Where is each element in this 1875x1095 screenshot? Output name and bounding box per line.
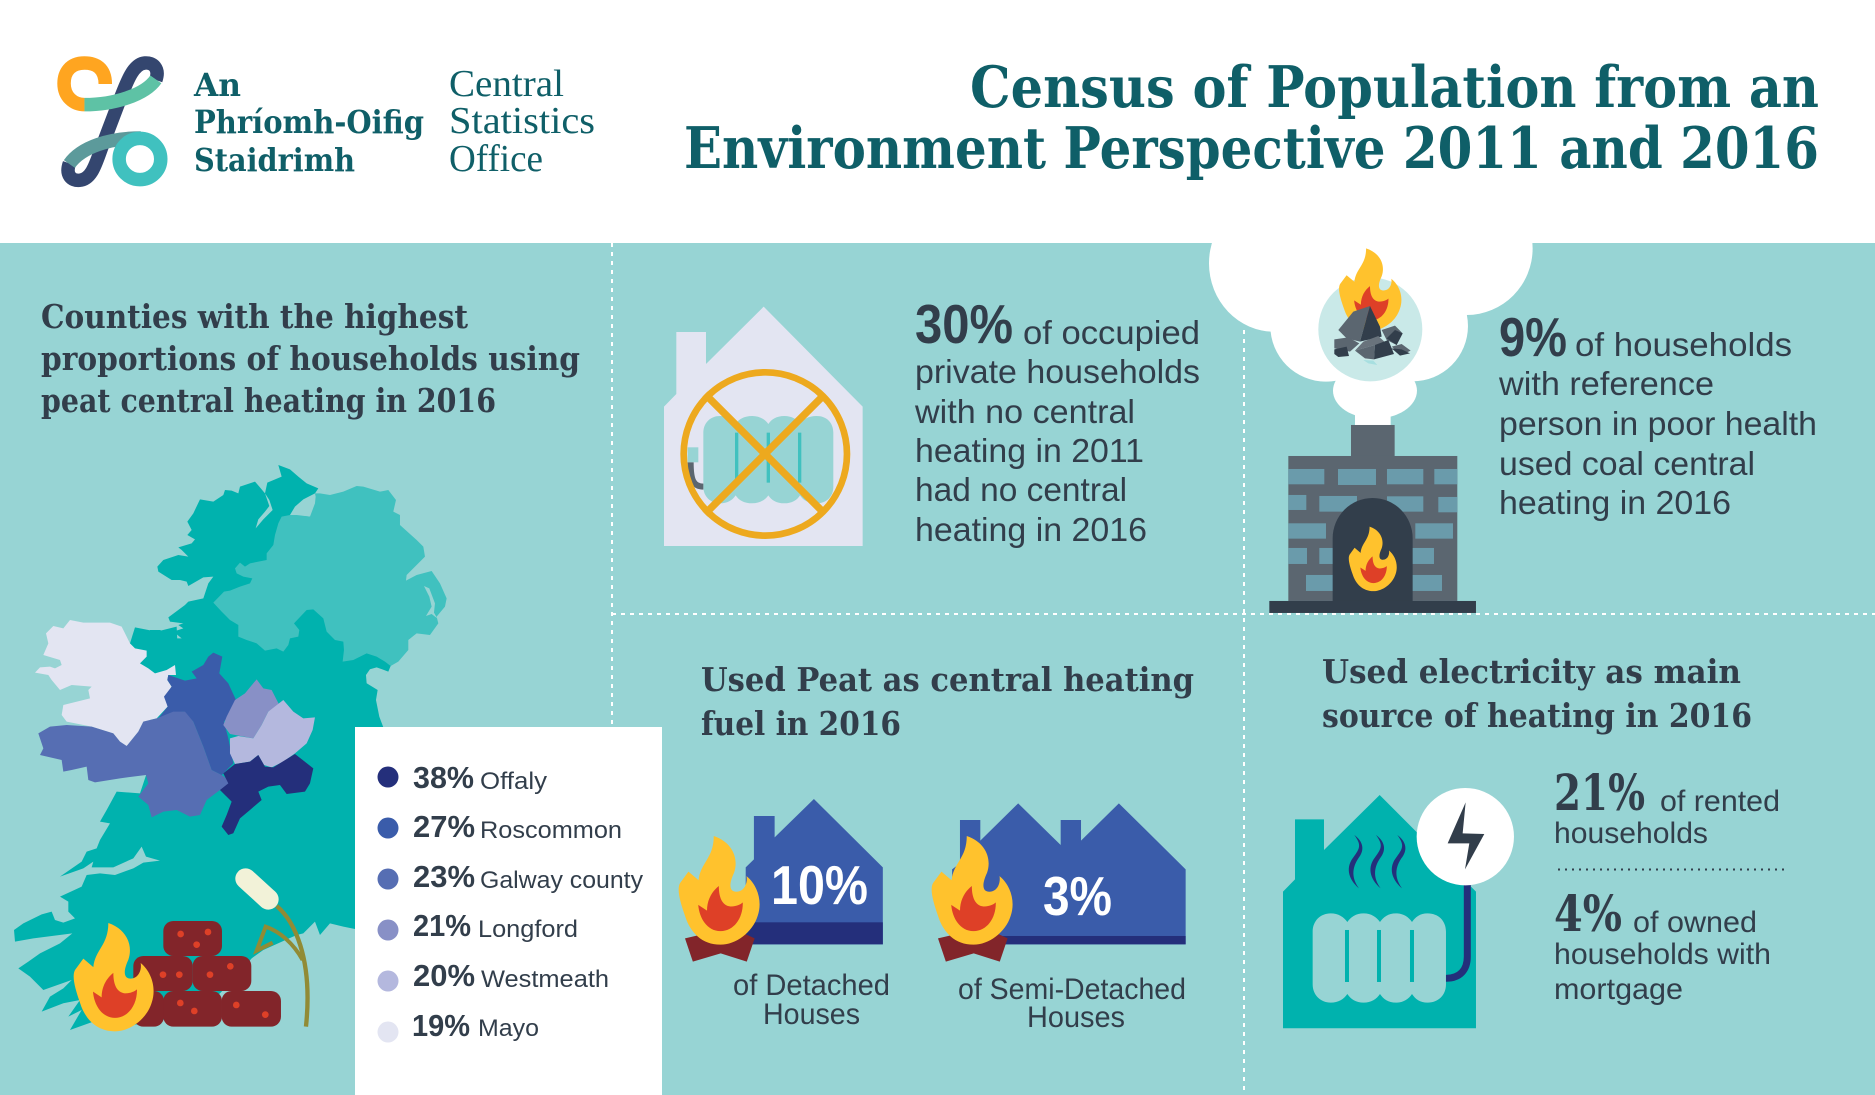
map heading	[41, 297, 580, 420]
map heading: peat central heating in 2016	[41, 381, 496, 420]
21% statistic: of rented	[1660, 785, 1780, 818]
semi-detached label: Houses	[1027, 1001, 1125, 1034]
icon: semi-detached houses	[952, 803, 1186, 944]
chimney stack	[1351, 425, 1395, 457]
legend dots	[378, 766, 398, 1042]
Northern Ireland	[213, 486, 447, 666]
legend counties: Westmeath	[481, 966, 609, 993]
radiator	[1313, 913, 1446, 1003]
fireplace arch	[1333, 498, 1413, 601]
4% statistic: mortgage	[1554, 973, 1683, 1006]
30% statistic: heating in 2011	[915, 432, 1144, 469]
21% statistic	[1554, 763, 1780, 850]
30% statistic	[914, 293, 1200, 548]
county: Roscommon	[158, 653, 236, 775]
legend values: 23%	[413, 859, 475, 894]
legend counties: Mayo	[478, 1015, 539, 1042]
chimney body	[1288, 456, 1457, 601]
logo English name: Statistics	[449, 100, 595, 142]
map of Ireland	[14, 465, 447, 1030]
logo Irish name	[193, 66, 424, 179]
4% statistic: 4%	[1554, 884, 1622, 943]
bricks	[1288, 469, 1457, 591]
legend values: 21%	[413, 908, 471, 943]
9% statistic: heating in 2016	[1499, 484, 1731, 521]
smoke cloud	[1209, 182, 1533, 427]
legend counties: Offaly	[480, 768, 547, 795]
map heading: proportions of households using	[41, 339, 580, 378]
legend counties: Longford	[478, 916, 578, 943]
electricity statistics	[1554, 763, 1786, 1006]
icon: flame on coal	[1339, 248, 1401, 330]
peat fuel heading: Used Peat as central heating	[701, 660, 1194, 699]
Strangford Lough	[424, 586, 437, 618]
3% value: 3%	[1043, 865, 1112, 927]
electricity heading	[1322, 652, 1752, 735]
icon: electric heated house	[1283, 788, 1514, 1028]
island: southern base	[14, 713, 373, 1030]
logo English name: Office	[449, 138, 543, 180]
radiator	[688, 416, 833, 503]
legend	[355, 727, 662, 1095]
detached label: Houses	[763, 998, 860, 1031]
30% statistic: with no central	[914, 393, 1135, 430]
legend values: 20%	[413, 958, 475, 993]
peat fuel heading: fuel in 2016	[701, 704, 901, 743]
title	[684, 54, 1819, 182]
detached label	[733, 969, 890, 1031]
10% value: 10%	[771, 854, 868, 916]
4% statistic	[1554, 884, 1771, 1006]
30% statistic: 30%	[915, 293, 1013, 355]
lightning bolt	[1448, 802, 1484, 869]
legend values: 38%	[413, 760, 474, 795]
30% statistic: private households	[915, 353, 1200, 390]
4% statistic: of owned	[1633, 906, 1757, 939]
icon: hearth flame	[1349, 527, 1397, 591]
county: Galway	[38, 712, 228, 817]
map heading: Counties with the highest	[41, 297, 469, 336]
logo mark	[64, 63, 161, 180]
prohibition sign	[684, 372, 847, 536]
9% statistic: with reference	[1498, 365, 1714, 402]
semi-detached label	[958, 973, 1186, 1034]
county: Longford	[223, 679, 279, 738]
icon: house with crossed-out radiator	[664, 307, 863, 546]
legend counties: Roscommon	[480, 817, 622, 844]
peat fuel heading	[701, 660, 1194, 743]
logo English name	[449, 63, 595, 180]
logo: CSO	[64, 63, 595, 180]
30% statistic: heating in 2016	[915, 511, 1147, 548]
legend values: 19%	[412, 1008, 470, 1043]
legend panel	[355, 727, 662, 1095]
legend counties	[478, 768, 643, 1042]
island: Sligo coast	[130, 627, 180, 723]
electricity badge	[1417, 788, 1514, 885]
logo Irish name: Staidrimh	[194, 141, 355, 179]
21% statistic: households	[1554, 817, 1708, 850]
island: northern base	[150, 465, 410, 730]
30% statistic: of occupied	[1023, 314, 1200, 351]
icon: chimney with smoke cloud	[1209, 182, 1533, 613]
semi-detached label: of Semi-Detached	[958, 973, 1186, 1006]
9% statistic: used coal central	[1499, 445, 1755, 482]
legend counties: Galway county	[480, 867, 643, 894]
county: Offaly	[220, 754, 313, 835]
electricity heading: Used electricity as main	[1322, 652, 1741, 691]
legend values: 27%	[413, 809, 475, 844]
9% statistic: 9%	[1499, 306, 1567, 368]
header band	[0, 0, 1875, 243]
9% statistic: of households	[1575, 326, 1792, 363]
9% statistic: person in poor health	[1499, 405, 1817, 442]
peat bricks	[133, 921, 281, 1027]
coal pile	[1334, 306, 1411, 365]
4% statistic: households with	[1554, 938, 1771, 971]
logo English name: Central	[449, 63, 564, 105]
logo Irish name: An	[193, 66, 241, 104]
bulrush plant	[246, 879, 308, 1027]
30% statistic: had no central	[915, 471, 1127, 508]
county: Westmeath	[230, 700, 315, 767]
power cable	[1446, 883, 1467, 978]
chimney base	[1269, 601, 1476, 613]
icon: semi-detached flame and logs	[932, 836, 1013, 962]
electricity heading: source of heating in 2016	[1322, 696, 1752, 735]
background	[0, 243, 1875, 1095]
icon: detached flame and logs	[679, 836, 760, 962]
9% statistic	[1498, 306, 1817, 521]
icon: detached house	[746, 799, 883, 944]
county: Mayo	[35, 620, 176, 746]
icon: map flame	[74, 923, 154, 1031]
detached label: of Detached	[733, 969, 890, 1002]
logo Irish name: Phríomh-Oifig	[194, 103, 424, 141]
legend values	[412, 760, 475, 1043]
heat waves	[1349, 835, 1405, 888]
Lough Swilly	[256, 493, 273, 528]
21% statistic: 21%	[1554, 763, 1645, 822]
